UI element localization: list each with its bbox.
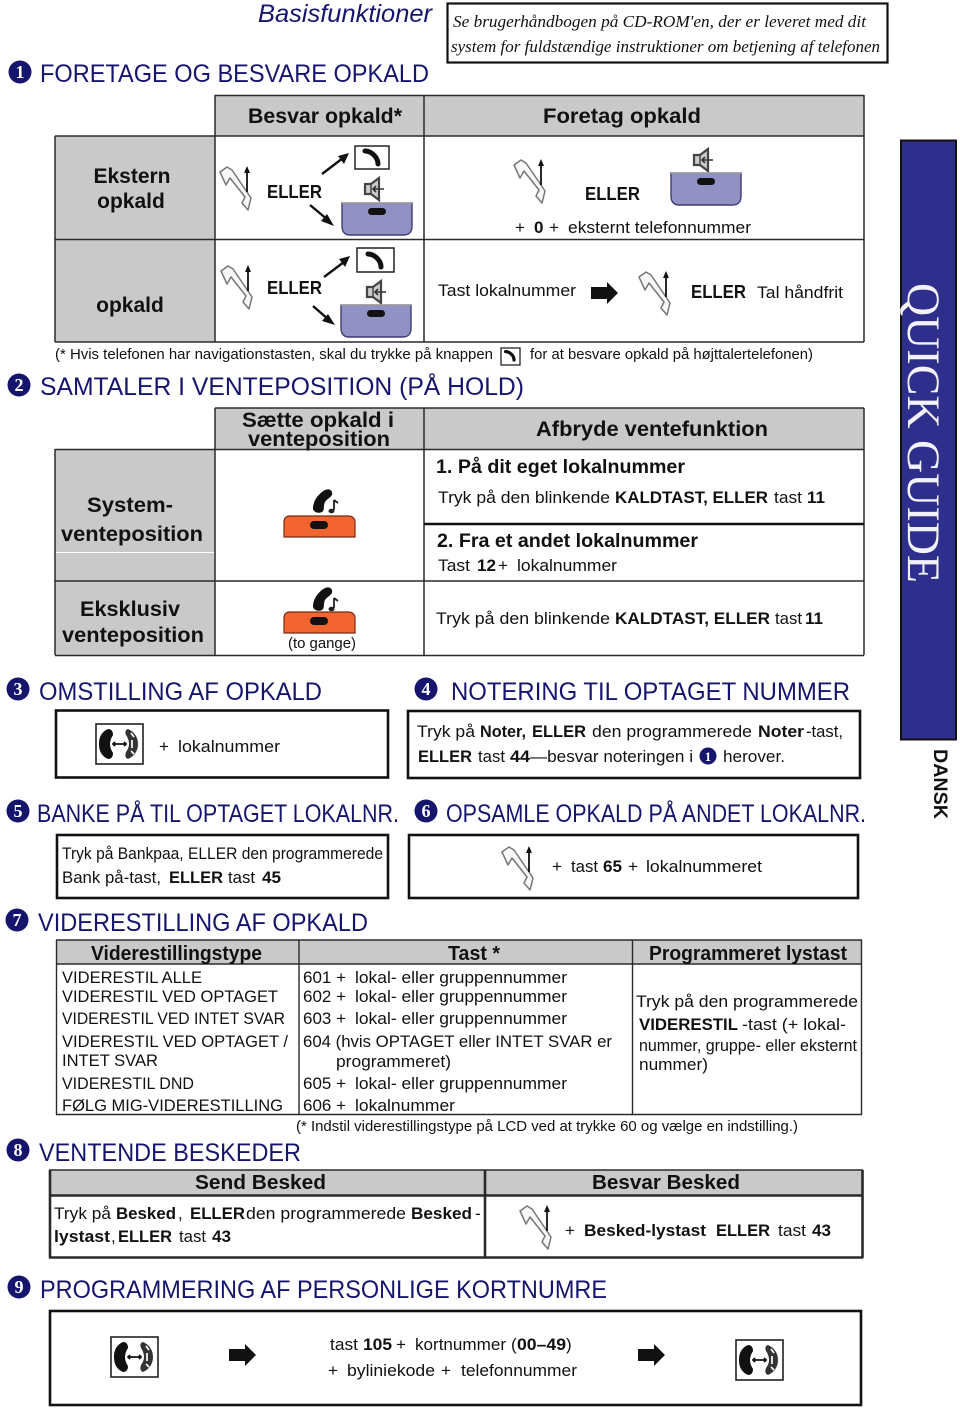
text: send message: den programmerede bbox=[246, 1204, 406, 1223]
column: programmed key: nummer, gruppe- eller eksternt bbox=[639, 1036, 857, 1055]
panel: call pickup: + bbox=[552, 857, 562, 876]
table: call forwarding bbox=[56, 940, 862, 1115]
text: exclusive hold release: KALDTAST, ELLER bbox=[615, 609, 770, 628]
header: Besvar opkald: Besvar opkald* bbox=[248, 105, 403, 128]
header: Sætte opkald i venteposition: Sætte opkald i bbox=[242, 409, 394, 432]
heading 3: Omstilling af opkald: OMSTILLING AF OPKALD bbox=[39, 678, 322, 706]
panel: camp-on note: den programmerede bbox=[592, 722, 752, 741]
text: send message: , bbox=[178, 1204, 183, 1223]
header: Foretag opkald: Foretag opkald bbox=[543, 105, 701, 128]
column header: Programmeret lystast: Programmeret lystast bbox=[649, 943, 847, 965]
answer internal: icons bbox=[221, 248, 411, 337]
make external: icons and text: eksternt telefonnummer bbox=[568, 218, 751, 237]
panel: speed dial: ( bbox=[511, 1335, 517, 1354]
text: answer message: 43 bbox=[812, 1221, 831, 1240]
panel: camp-on note: Noter, bbox=[480, 722, 526, 741]
header: Afbryde ventefunktion: Afbryde ventefunktion bbox=[536, 418, 768, 441]
text: send message: lystast bbox=[54, 1227, 110, 1246]
make internal: icons and text: Tal håndfrit bbox=[757, 283, 843, 302]
text: own extension: Tryk på den blinkende bbox=[438, 488, 610, 507]
panel: speed dial: ) bbox=[566, 1335, 572, 1354]
heading 1: Foretage og besvare opkald: 1 bbox=[16, 62, 24, 82]
note box: user manual notice: Se brugerhåndbogen på CD-ROM'en, der er leveret med dit bbox=[453, 12, 867, 31]
text: own extension: tast bbox=[774, 488, 802, 507]
column: keys: 605 + bbox=[303, 1074, 346, 1093]
make external: icons and text: + bbox=[515, 218, 525, 237]
footnote: LCD: (* Indstil viderestillingstype på LCD ved at trykke 60 og vælge en indstilling.) bbox=[296, 1119, 798, 1135]
text: own extension: 1. På dit eget lokalnummer bbox=[436, 457, 686, 478]
panel: camp-on note bbox=[408, 711, 860, 778]
row label: Eksklusiv venteposition: Eksklusiv bbox=[80, 598, 180, 621]
panel: hold table bbox=[55, 408, 864, 656]
row label: Ekstern opkald: Ekstern bbox=[93, 165, 171, 188]
heading 9: Programmering af personlige kortnumre: 9 bbox=[14, 1277, 24, 1297]
heading 2: Samtaler i venteposition: SAMTALER I VENTEPOSITION (PÅ HOLD) bbox=[40, 371, 524, 401]
row label: System-venteposition: venteposition bbox=[61, 523, 203, 546]
row label: Eksklusiv venteposition bbox=[62, 598, 204, 647]
column: keys: programmeret) bbox=[336, 1052, 451, 1071]
make external: icons and text bbox=[514, 149, 751, 237]
note box: user manual notice: system for fuldstændige instruktioner om betjening af telefonen bbox=[451, 37, 880, 56]
heading 2: Samtaler i venteposition: 2 bbox=[14, 375, 24, 395]
text: other extension: Tast bbox=[438, 556, 470, 575]
column: keys: 604 (hvis OPTAGET eller INTET SVAR er bbox=[303, 1032, 612, 1051]
make internal: icons and text: ELLER bbox=[691, 282, 746, 302]
column: forwarding types: INTET SVAR bbox=[62, 1051, 158, 1070]
text: send message: Besked bbox=[411, 1204, 472, 1223]
panel: speed dial: kortnummer bbox=[415, 1335, 506, 1354]
row label: System-venteposition bbox=[61, 494, 203, 546]
make external: icons and text: 0 bbox=[534, 218, 543, 237]
text: other extension: + bbox=[498, 556, 508, 575]
text: exclusive hold release: Tryk på den blinkende bbox=[436, 609, 610, 628]
panel: camp-on note: 1 bbox=[705, 749, 711, 764]
column header: Viderestillingstype: Viderestillingstype bbox=[91, 943, 262, 965]
column: keys: 602 + bbox=[303, 987, 346, 1006]
column: forwarding types: VIDERESTIL DND bbox=[62, 1074, 194, 1093]
heading 8: Ventende beskeder: VENTENDE BESKEDER bbox=[39, 1139, 301, 1167]
column: keys: lokal- eller gruppennummer bbox=[355, 1074, 567, 1093]
panel: call pickup: + bbox=[628, 857, 638, 876]
icon: exclusive hold key bbox=[284, 587, 356, 652]
panel: speed dial: byliniekode bbox=[347, 1361, 435, 1380]
panel: camp-on note: ELLER bbox=[532, 722, 586, 741]
column: keys: lokal- eller gruppennummer bbox=[355, 968, 567, 987]
text: answer message bbox=[520, 1205, 831, 1249]
column: keys: lokal- eller gruppennummer bbox=[355, 1009, 567, 1028]
panel: camp-on note: 44 bbox=[510, 747, 531, 766]
panel: camp-on: Tryk på Bankpaa, ELLER den programmerede bbox=[62, 844, 383, 863]
column: keys: 606 + bbox=[303, 1096, 346, 1115]
text: other extension: 12 bbox=[477, 556, 496, 575]
panel: speed dial: 00–49 bbox=[517, 1335, 566, 1354]
column: programmed key: nummer) bbox=[639, 1055, 708, 1074]
heading 3: Omstilling af opkald: 3 bbox=[14, 679, 22, 699]
heading 1: Foretage og besvare opkald: FORETAGE OG BESVARE OPKALD bbox=[40, 60, 429, 88]
panel: speed dial bbox=[50, 1311, 861, 1405]
panel: messages bbox=[49, 1170, 863, 1258]
heading 7: Viderestilling af opkald: 7 bbox=[12, 910, 22, 930]
text: answer message: + bbox=[565, 1221, 575, 1240]
panel: camp-on note: tast bbox=[478, 747, 505, 766]
text: own extension: KALDTAST, ELLER bbox=[615, 488, 768, 507]
column: keys: lokalnummer bbox=[355, 1096, 455, 1115]
column: programmed key bbox=[636, 992, 858, 1074]
make external: icons and text: ELLER bbox=[585, 184, 640, 204]
heading 6: Opsamle opkald på andet lokalnr: 6 bbox=[422, 801, 430, 821]
side label: Dansk: DANSK bbox=[929, 749, 950, 819]
header: Besvar Besked: Besvar Besked bbox=[592, 1171, 740, 1194]
text: other extension bbox=[437, 531, 699, 575]
column: forwarding types: FØLG MIG-VIDERESTILLING bbox=[62, 1096, 283, 1115]
panel: transfer: lokalnummer bbox=[178, 737, 280, 756]
text: own extension bbox=[436, 457, 825, 507]
heading 9: Programmering af personlige kortnumre: PROGRAMMERING AF PERSONLIGE KORTNUMRE bbox=[40, 1276, 607, 1304]
column: programmed key: VIDERESTIL bbox=[639, 1015, 738, 1034]
panel: camp-on: ELLER bbox=[169, 868, 223, 887]
heading 5: Banke på til optaget lokalnr: BANKE PÅ TIL OPTAGET LOKALNR. bbox=[37, 798, 399, 828]
side tab: Quick Guide bbox=[897, 140, 956, 740]
title: Basisfunktioner: Basisfunktioner bbox=[258, 0, 434, 28]
header: Sætte opkald i venteposition: venteposition bbox=[248, 428, 390, 451]
text: send message: - bbox=[475, 1204, 481, 1223]
column: keys bbox=[303, 968, 612, 1115]
panel: transfer: + bbox=[159, 737, 169, 756]
panel: speed dial: + bbox=[396, 1335, 406, 1354]
make internal: icons and text: Tast lokalnummer bbox=[438, 281, 576, 300]
row label: Ekstern opkald: opkald bbox=[97, 190, 165, 213]
text: other extension: lokalnummer bbox=[517, 556, 617, 575]
panel: call table bbox=[55, 95, 864, 342]
panel: speed dial: telefonnummer bbox=[461, 1361, 577, 1380]
icon: exclusive hold key: (to gange) bbox=[288, 636, 356, 652]
footnote with hook icon bbox=[55, 347, 813, 365]
text: send message bbox=[54, 1204, 481, 1246]
text: exclusive hold release: 11 bbox=[805, 609, 823, 628]
text: answer message: Besked-lystast bbox=[584, 1221, 706, 1240]
header: Send Besked: Send Besked bbox=[195, 1171, 326, 1194]
column header: Tast: Tast * bbox=[448, 943, 500, 965]
panel: speed dial: 105 bbox=[363, 1335, 392, 1354]
answer external: icons: ELLER bbox=[267, 182, 322, 202]
text: exclusive hold release bbox=[436, 609, 823, 628]
panel: transfer bbox=[56, 710, 388, 778]
icon: system hold key bbox=[284, 489, 355, 537]
column: forwarding types: VIDERESTIL VED INTET SVAR bbox=[62, 1009, 285, 1028]
make internal: icons and text bbox=[438, 271, 843, 315]
make external: icons and text: + bbox=[549, 218, 559, 237]
panel: camp-on: 45 bbox=[262, 868, 281, 887]
text: send message: Besked bbox=[116, 1204, 176, 1223]
heading 7: Viderestilling af opkald: VIDERESTILLING AF OPKALD bbox=[38, 909, 368, 937]
text: answer message: tast bbox=[778, 1221, 806, 1240]
column: keys: 601 + bbox=[303, 968, 346, 987]
heading 4: Notering til optaget nummer: 4 bbox=[422, 679, 430, 699]
side tab: Quick Guide: QUICK GUIDE bbox=[897, 283, 949, 583]
row label: Eksklusiv venteposition: venteposition bbox=[62, 624, 204, 647]
column: forwarding types: VIDERESTIL VED OPTAGET / bbox=[62, 1032, 288, 1051]
panel: camp-on note: ELLER bbox=[418, 747, 472, 766]
text: send message: 43 bbox=[212, 1227, 231, 1246]
answer internal: icons: ELLER bbox=[267, 278, 322, 298]
heading 8: Ventende beskeder: 8 bbox=[14, 1140, 22, 1160]
column: keys: 603 + bbox=[303, 1009, 346, 1028]
text: send message: , bbox=[111, 1227, 116, 1246]
column: programmed key: -tast (+ lokal- bbox=[742, 1015, 846, 1034]
panel: call pickup: 65 bbox=[603, 857, 622, 876]
panel: speed dial: + bbox=[328, 1361, 338, 1380]
note box: user manual notice bbox=[448, 4, 888, 62]
panel: speed dial: tast bbox=[330, 1335, 358, 1354]
panel: call pickup: lokalnummeret bbox=[646, 857, 762, 876]
column: forwarding types: VIDERESTIL VED OPTAGET bbox=[62, 987, 278, 1006]
column: forwarding types: VIDERESTIL ALLE bbox=[62, 968, 202, 987]
text: own extension: 11 bbox=[807, 488, 825, 507]
row label: Ekstern opkald bbox=[93, 165, 171, 213]
heading 6: Opsamle opkald på andet lokalnr: OPSAMLE OPKALD PÅ ANDET LOKALNR. bbox=[446, 798, 866, 828]
panel: speed dial: + bbox=[441, 1361, 451, 1380]
footnote with hook icon: for at besvare opkald på højttalertelefonen) bbox=[530, 347, 813, 363]
panel: camp-on note: Tryk på bbox=[417, 722, 476, 741]
text: exclusive hold release: tast bbox=[775, 609, 802, 628]
column: forwarding types bbox=[62, 968, 288, 1115]
text: send message: ELLER bbox=[118, 1227, 172, 1246]
panel: camp-on note: -tast, bbox=[806, 722, 843, 741]
row label: opkald: opkald bbox=[96, 294, 164, 317]
panel: camp-on: tast bbox=[228, 868, 255, 887]
footnote with hook icon: (* Hvis telefonen har navigationstasten, skal du trykke på knappen bbox=[55, 347, 493, 363]
panel: camp-on note: Noter bbox=[758, 722, 804, 741]
column: programmed key: Tryk på den programmerede bbox=[636, 992, 858, 1011]
column: keys: lokal- eller gruppennummer bbox=[355, 987, 567, 1006]
text: send message: Tryk på bbox=[54, 1204, 112, 1223]
text: send message: tast bbox=[179, 1227, 206, 1246]
row label: System-venteposition: System- bbox=[87, 494, 173, 517]
panel: camp-on bbox=[57, 835, 388, 898]
panel: camp-on note: herover. bbox=[723, 747, 785, 766]
heading 4: Notering til optaget nummer: NOTERING TIL OPTAGET NUMMER bbox=[451, 678, 850, 706]
answer external: icons bbox=[220, 146, 412, 235]
header: Sætte opkald i venteposition bbox=[242, 409, 394, 451]
text: answer message: ELLER bbox=[716, 1221, 770, 1240]
panel: camp-on note: —besvar noteringen i bbox=[530, 747, 693, 766]
panel: call pickup: tast bbox=[571, 857, 598, 876]
heading 5: Banke på til optaget lokalnr: 5 bbox=[14, 801, 22, 821]
panel: camp-on: Bank på-tast, bbox=[62, 868, 161, 887]
text: send message: ELLER bbox=[190, 1204, 245, 1223]
panel: call pickup bbox=[409, 835, 858, 898]
text: other extension: 2. Fra et andet lokalnummer bbox=[437, 531, 699, 552]
